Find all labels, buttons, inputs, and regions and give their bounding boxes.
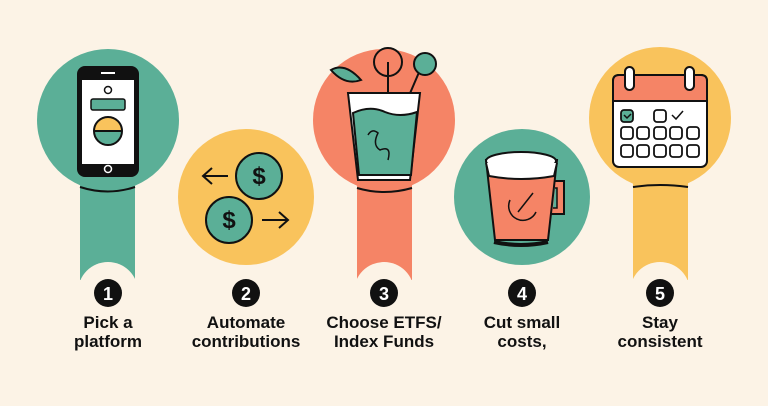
- icon: coins with arrows: [203, 153, 288, 243]
- ribbon 1: [80, 160, 135, 280]
- labels: contributions: [192, 332, 300, 351]
- labels: Automate: [207, 313, 285, 332]
- circle 3: [313, 49, 455, 191]
- number badges: 3: [379, 284, 389, 304]
- icon: phone: [77, 66, 139, 177]
- step 4: cut small costs: [454, 129, 590, 265]
- icon: glass with leaf: [331, 48, 436, 180]
- number badges: [94, 279, 674, 307]
- labels: Cut small: [484, 313, 560, 332]
- labels: platform: [74, 332, 142, 351]
- labels: consistent: [617, 332, 703, 351]
- circle 5: [589, 47, 731, 189]
- icon: mug: [486, 152, 564, 245]
- ribbon 5: [633, 160, 688, 280]
- step 3: choose ETFs: [313, 48, 455, 322]
- step 2: automate contributions: $: [222, 207, 236, 234]
- labels: [74, 313, 703, 351]
- labels: Index Funds: [334, 332, 434, 351]
- step 5: stay consistent: [589, 47, 731, 322]
- labels: Choose ETFS/: [326, 313, 442, 332]
- step 2: automate contributions: $: [252, 163, 266, 190]
- number badges: 2: [241, 284, 251, 304]
- icon: calendar: [613, 67, 707, 167]
- circle 1: [37, 49, 179, 191]
- number badges: 1: [103, 284, 113, 304]
- step 1: pick a platform: [37, 49, 179, 322]
- ribbon 3: [357, 160, 412, 280]
- number badges: 5: [655, 284, 665, 304]
- labels: costs,: [497, 332, 547, 351]
- number badges: 4: [517, 284, 527, 304]
- circle 2: [178, 129, 314, 265]
- labels: Pick a: [83, 313, 133, 332]
- labels: Stay: [642, 313, 678, 332]
- circle 4: [454, 129, 590, 265]
- step 2: automate contributions: [178, 129, 314, 265]
